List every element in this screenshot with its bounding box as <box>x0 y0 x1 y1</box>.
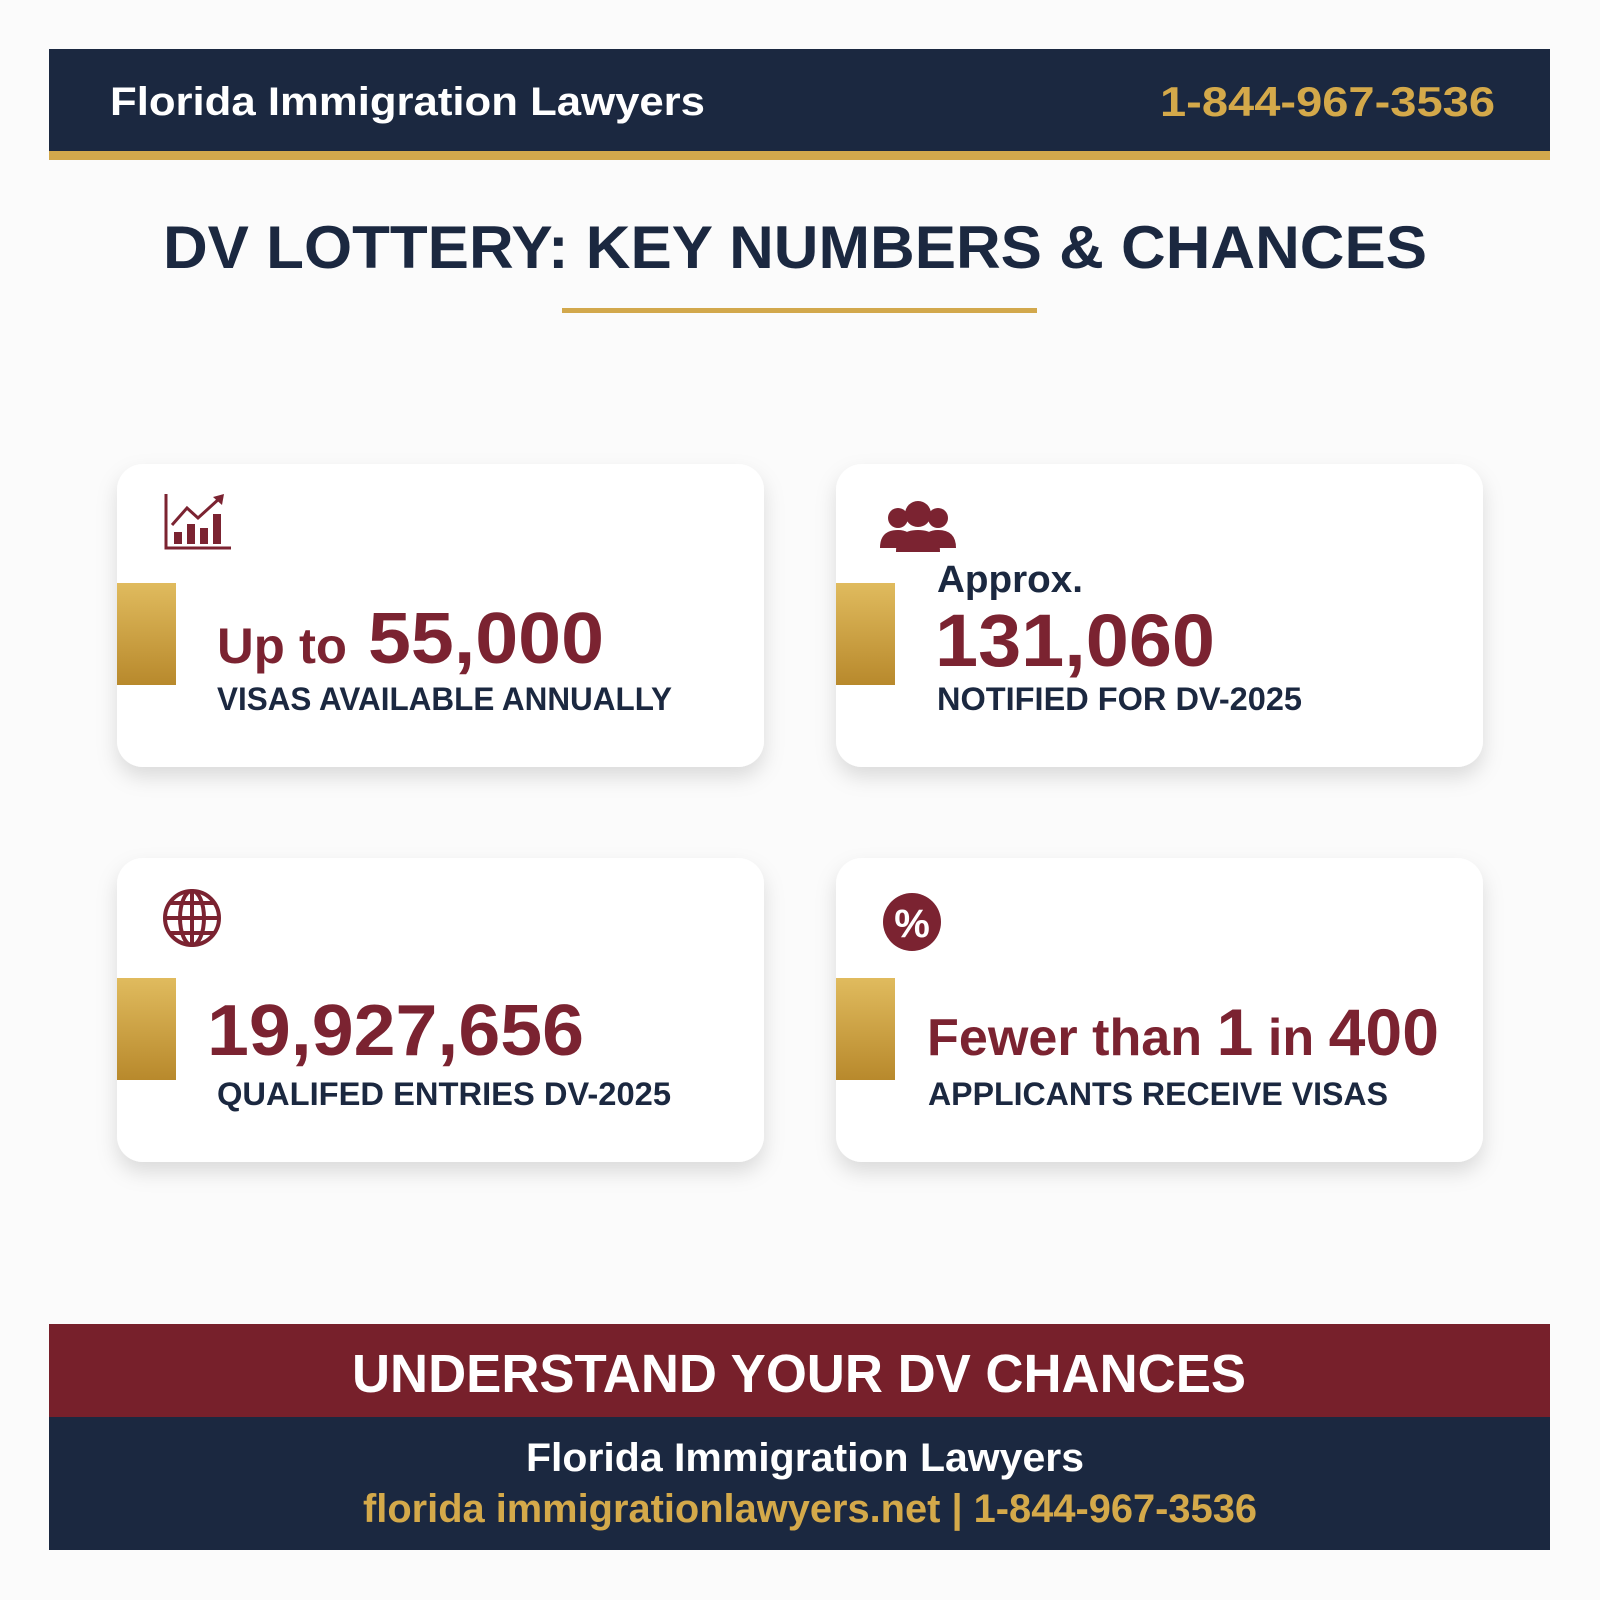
header bar <box>49 49 1550 160</box>
footer banner: UNDERSTAND YOUR DV CHANCES <box>352 1344 1246 1404</box>
panel: qualified entries: 19,927,656 <box>207 991 584 1071</box>
footer contact: Florida Immigration Lawyers <box>526 1436 1084 1480</box>
panel: visas available: 55,000 <box>368 599 604 679</box>
footer contact: florida immigrationlawyers.net | 1-844-967-3536 <box>363 1487 1257 1531</box>
panel: visas available: VISAS AVAILABLE ANNUALLY <box>217 681 672 717</box>
header bar: Florida Immigration Lawyers <box>110 80 705 124</box>
panel: qualified entries: QUALIFED ENTRIES DV-2025 <box>217 1076 671 1112</box>
header bar: 1-844-967-3536 <box>1160 78 1495 125</box>
footer contact <box>49 1417 1550 1550</box>
title: DV LOTTERY: KEY NUMBERS & CHANCES <box>163 214 1427 281</box>
panel: qualified entries <box>117 858 764 1162</box>
icon: percent: % <box>894 902 930 946</box>
panel: notified: 131,060 <box>935 599 1215 682</box>
icon: people <box>880 501 956 552</box>
icon: growth chart <box>166 494 231 548</box>
panel: odds: APPLICANTS RECEIVE VISAS <box>928 1076 1388 1112</box>
panel: visas available <box>117 464 764 767</box>
panel: odds: Fewer than 1 in 400 <box>927 995 1439 1069</box>
panel: notified <box>836 464 1483 767</box>
footer banner <box>49 1324 1550 1417</box>
icon: percent <box>883 893 941 951</box>
panel: visas available: Up to <box>217 618 347 674</box>
panel: notified: NOTIFIED FOR DV-2025 <box>937 681 1302 717</box>
panel: odds <box>836 858 1483 1162</box>
panel: notified: Approx. <box>937 559 1083 601</box>
icon: globe <box>165 891 219 945</box>
title <box>163 214 1427 313</box>
